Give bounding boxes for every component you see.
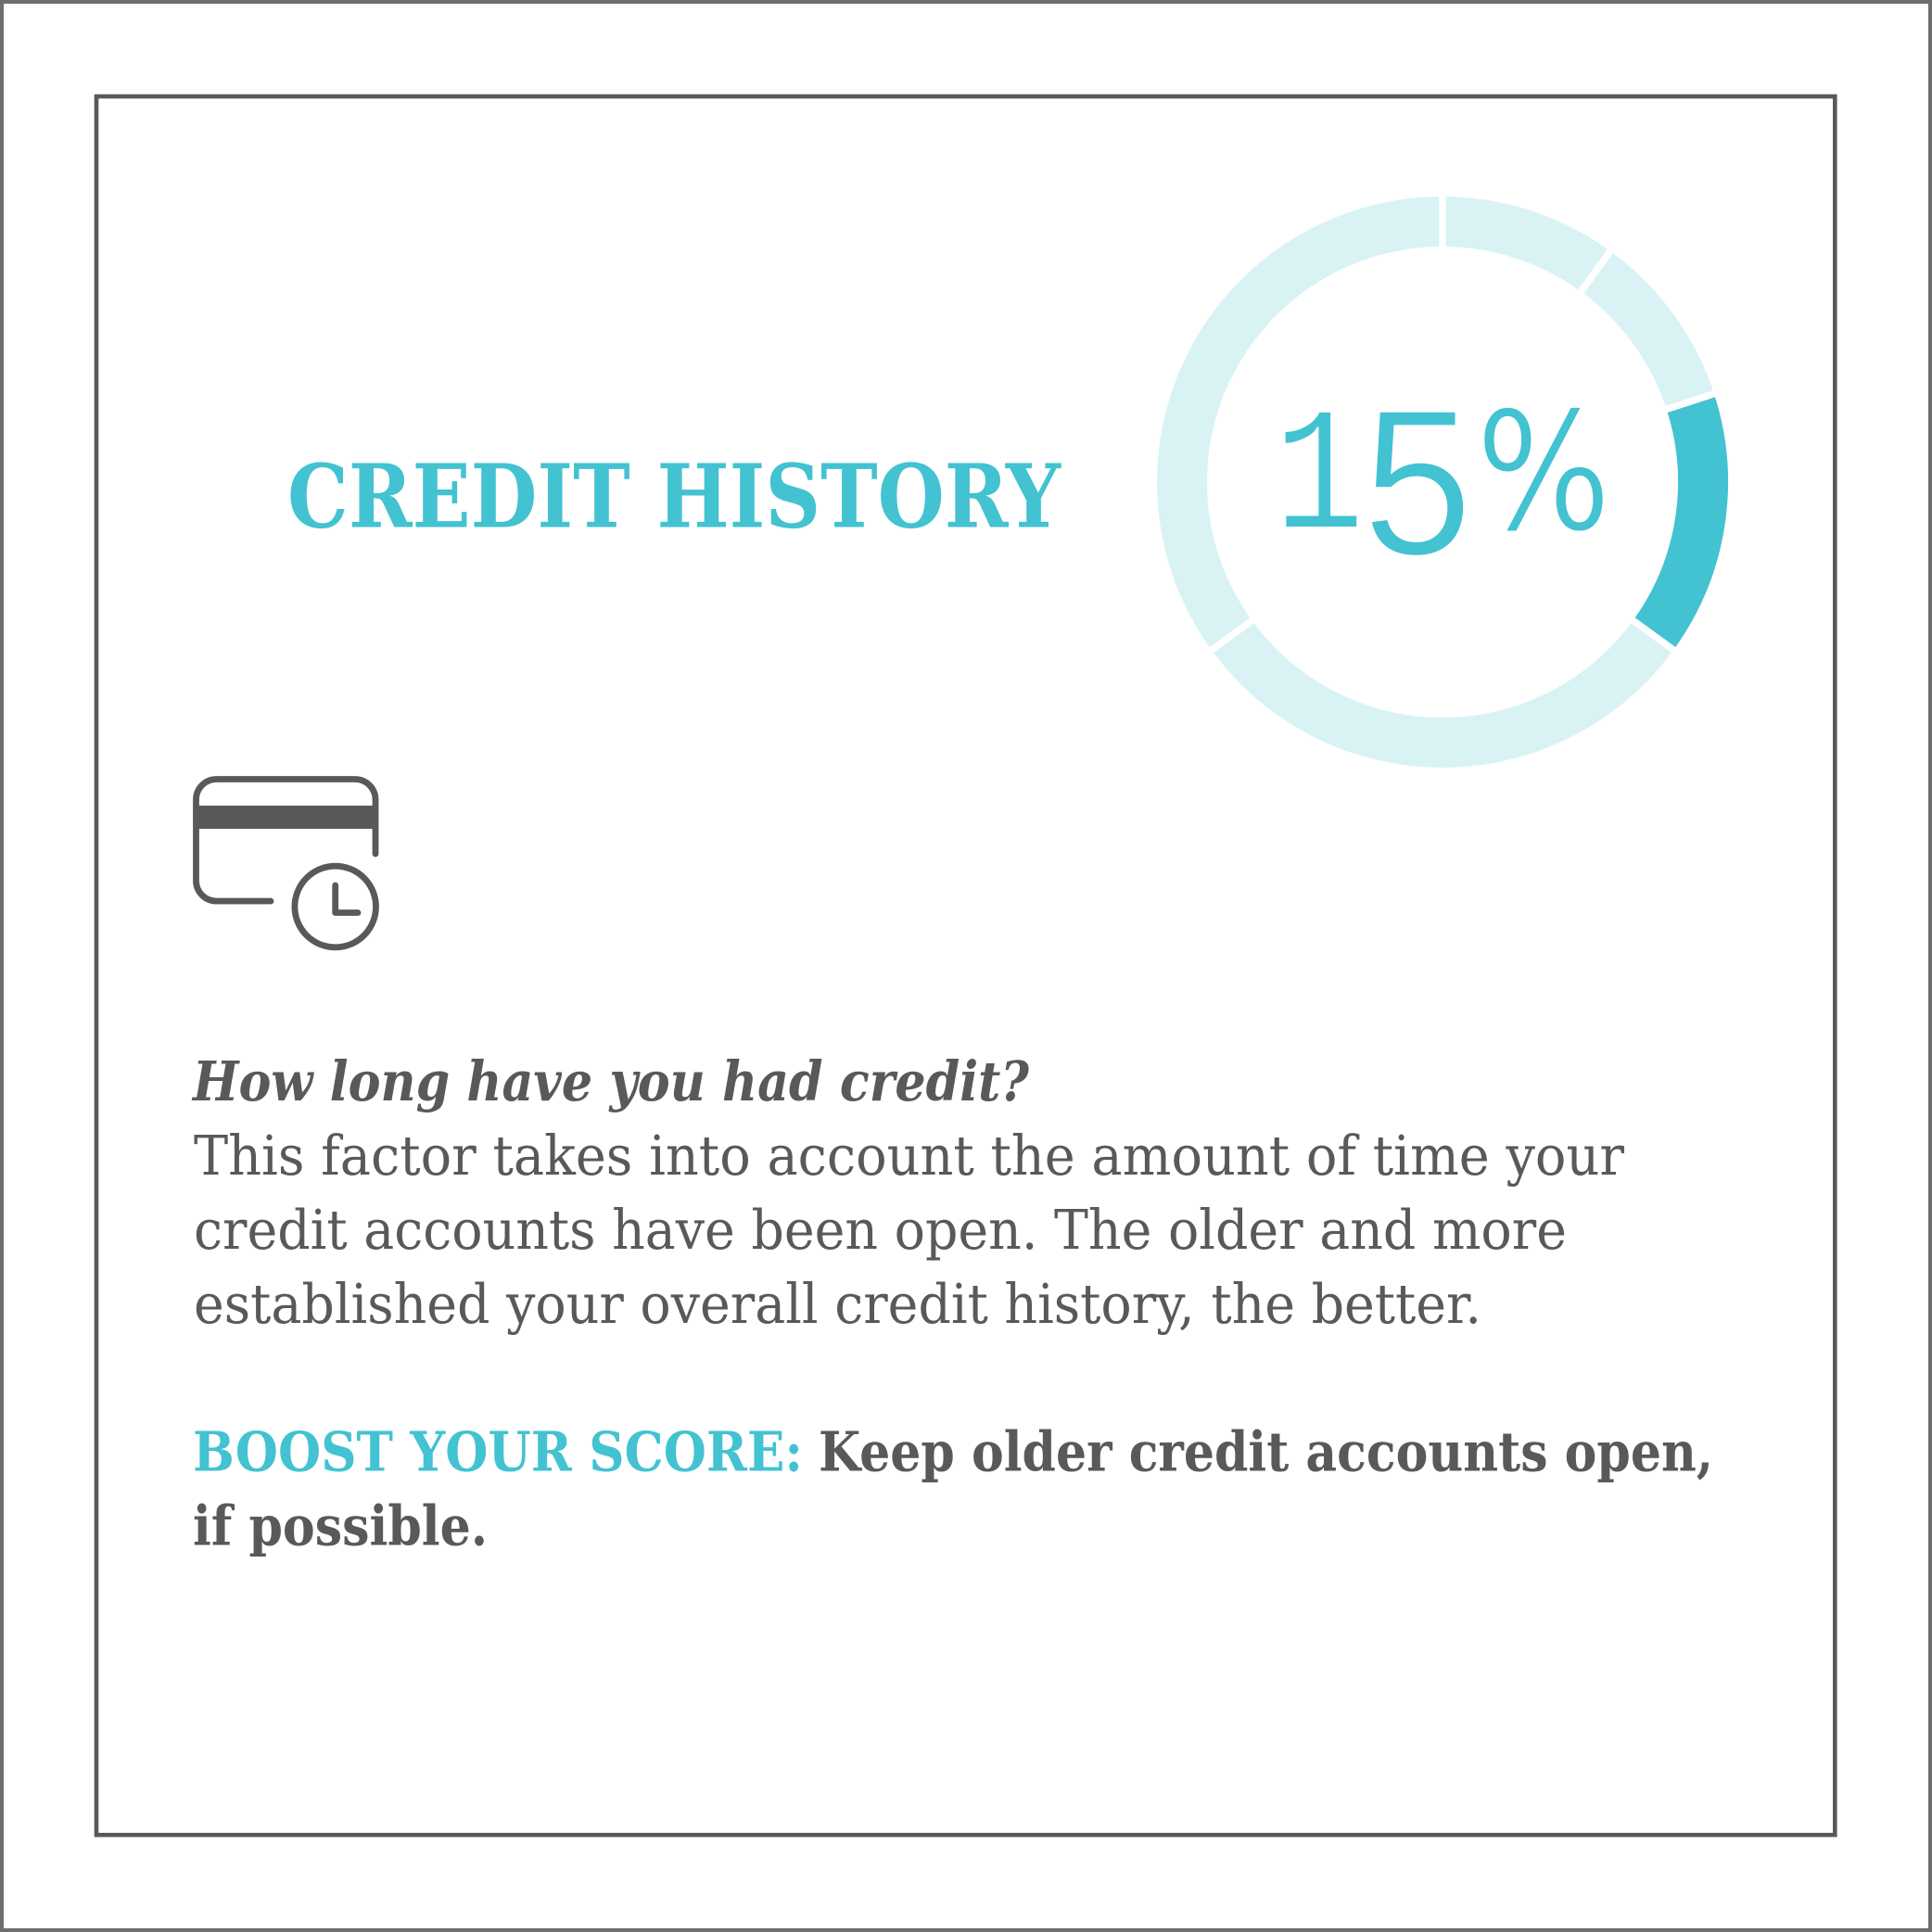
callout text line 1: Keep older credit accounts open, [819, 1420, 1713, 1483]
segment: light 4 [1182, 222, 1443, 635]
segment: light 3 [1232, 635, 1653, 743]
percentage value: % [1476, 376, 1611, 568]
segment: highlighted 15% [1653, 401, 1703, 635]
body line 1: This factor takes into account the amount of time your [194, 1124, 1625, 1188]
percentage value [1274, 373, 1611, 620]
percentage value: 1 [1274, 382, 1365, 581]
segment: light 1 [1443, 222, 1595, 272]
percentage value: 5 [1358, 373, 1477, 620]
body line 2: credit accounts have been open. The older and more [194, 1198, 1567, 1262]
callout label: BOOST YOUR SCORE: [193, 1420, 803, 1483]
clock hands [336, 885, 358, 912]
icon: credit card with clock [193, 779, 378, 947]
title: CREDIT HISTORY [287, 445, 1061, 549]
segment: light 2 [1595, 272, 1690, 401]
question heading: How long have you had credit? [191, 1049, 1030, 1113]
callout text line 2: if possible. [193, 1494, 488, 1557]
card stripe [193, 806, 378, 829]
clock face [295, 866, 376, 947]
boost your score callout [193, 1420, 1713, 1557]
body line 3: established your overall credit history, the better. [194, 1272, 1481, 1336]
card outline [197, 779, 375, 901]
body text block [191, 1049, 1625, 1336]
donut chart [1182, 185, 1724, 743]
